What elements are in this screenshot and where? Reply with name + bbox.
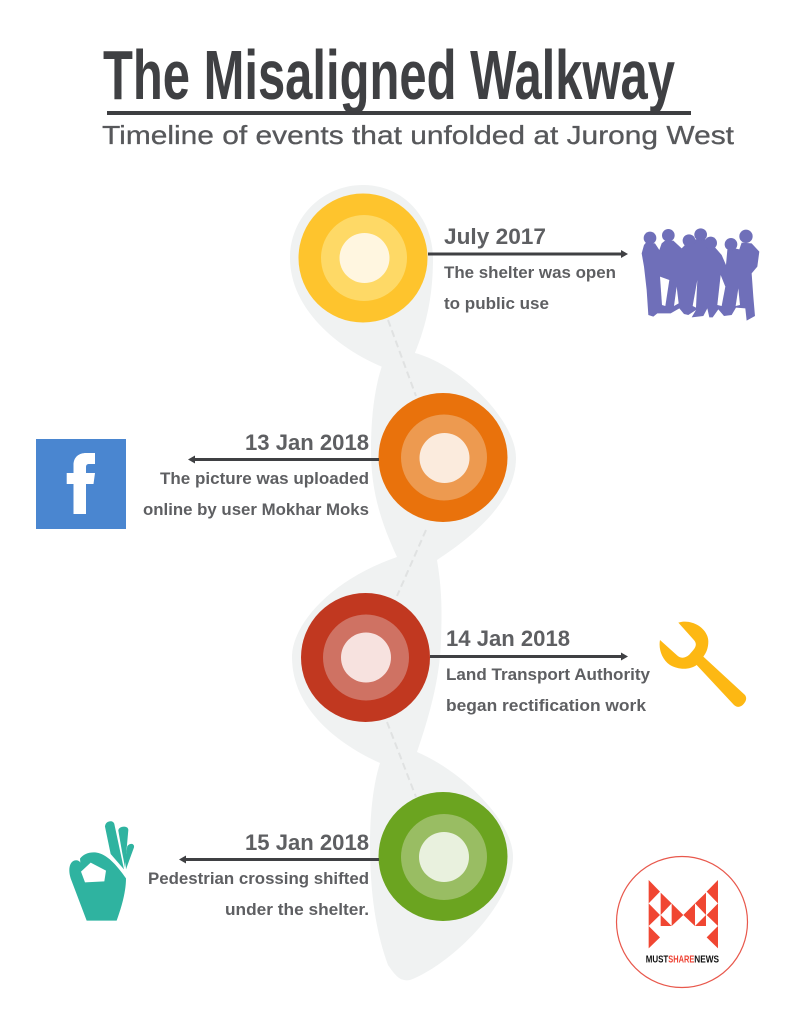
orange marker: [378, 393, 508, 522]
green marker: [378, 792, 508, 921]
description: [444, 264, 616, 313]
description: [446, 666, 651, 715]
event: 14 Jan 2018: [301, 593, 651, 722]
description: [148, 870, 369, 919]
icon: facebook: [36, 439, 126, 529]
description: [143, 470, 369, 519]
date: July 2017: [444, 224, 546, 249]
description: The shelter was open: [444, 264, 616, 282]
logo wordmark: SHARE: [668, 954, 694, 966]
icon: wrench: [660, 622, 746, 707]
event: July 2017: [298, 194, 628, 322]
description: Land Transport Authority: [446, 666, 651, 684]
timeline background ribbon: [290, 185, 516, 980]
icon: group of people: [642, 228, 759, 321]
description: to public use: [444, 295, 549, 313]
date: 15 Jan 2018: [245, 830, 369, 855]
yellow marker: [298, 194, 428, 322]
logo wordmark: [646, 954, 719, 966]
description: under the shelter.: [225, 901, 369, 919]
logo wordmark: NEWS: [694, 954, 719, 966]
logo wordmark: MUST: [646, 954, 669, 966]
arrow: [428, 250, 628, 258]
icon: ok hand: [69, 821, 134, 921]
title underline: [107, 111, 691, 115]
description: The picture was uploaded: [160, 470, 369, 488]
description: online by user Mokhar Moks: [143, 501, 369, 519]
logo mark: [649, 880, 718, 948]
event: 13 Jan 2018: [143, 393, 508, 522]
dashed connectors: [387, 320, 426, 797]
event: 15 Jan 2018: [148, 792, 508, 921]
arrow: [179, 856, 379, 864]
subtitle: Timeline of events that unfolded at Jurong West: [102, 120, 735, 150]
arrow: [188, 456, 379, 464]
description: began rectification work: [446, 697, 647, 715]
date: 14 Jan 2018: [446, 626, 570, 651]
arrow: [430, 652, 628, 660]
red marker: [301, 593, 430, 722]
description: Pedestrian crossing shifted: [148, 870, 369, 888]
date: 13 Jan 2018: [245, 430, 369, 455]
logo: Must Share News: [616, 856, 748, 988]
